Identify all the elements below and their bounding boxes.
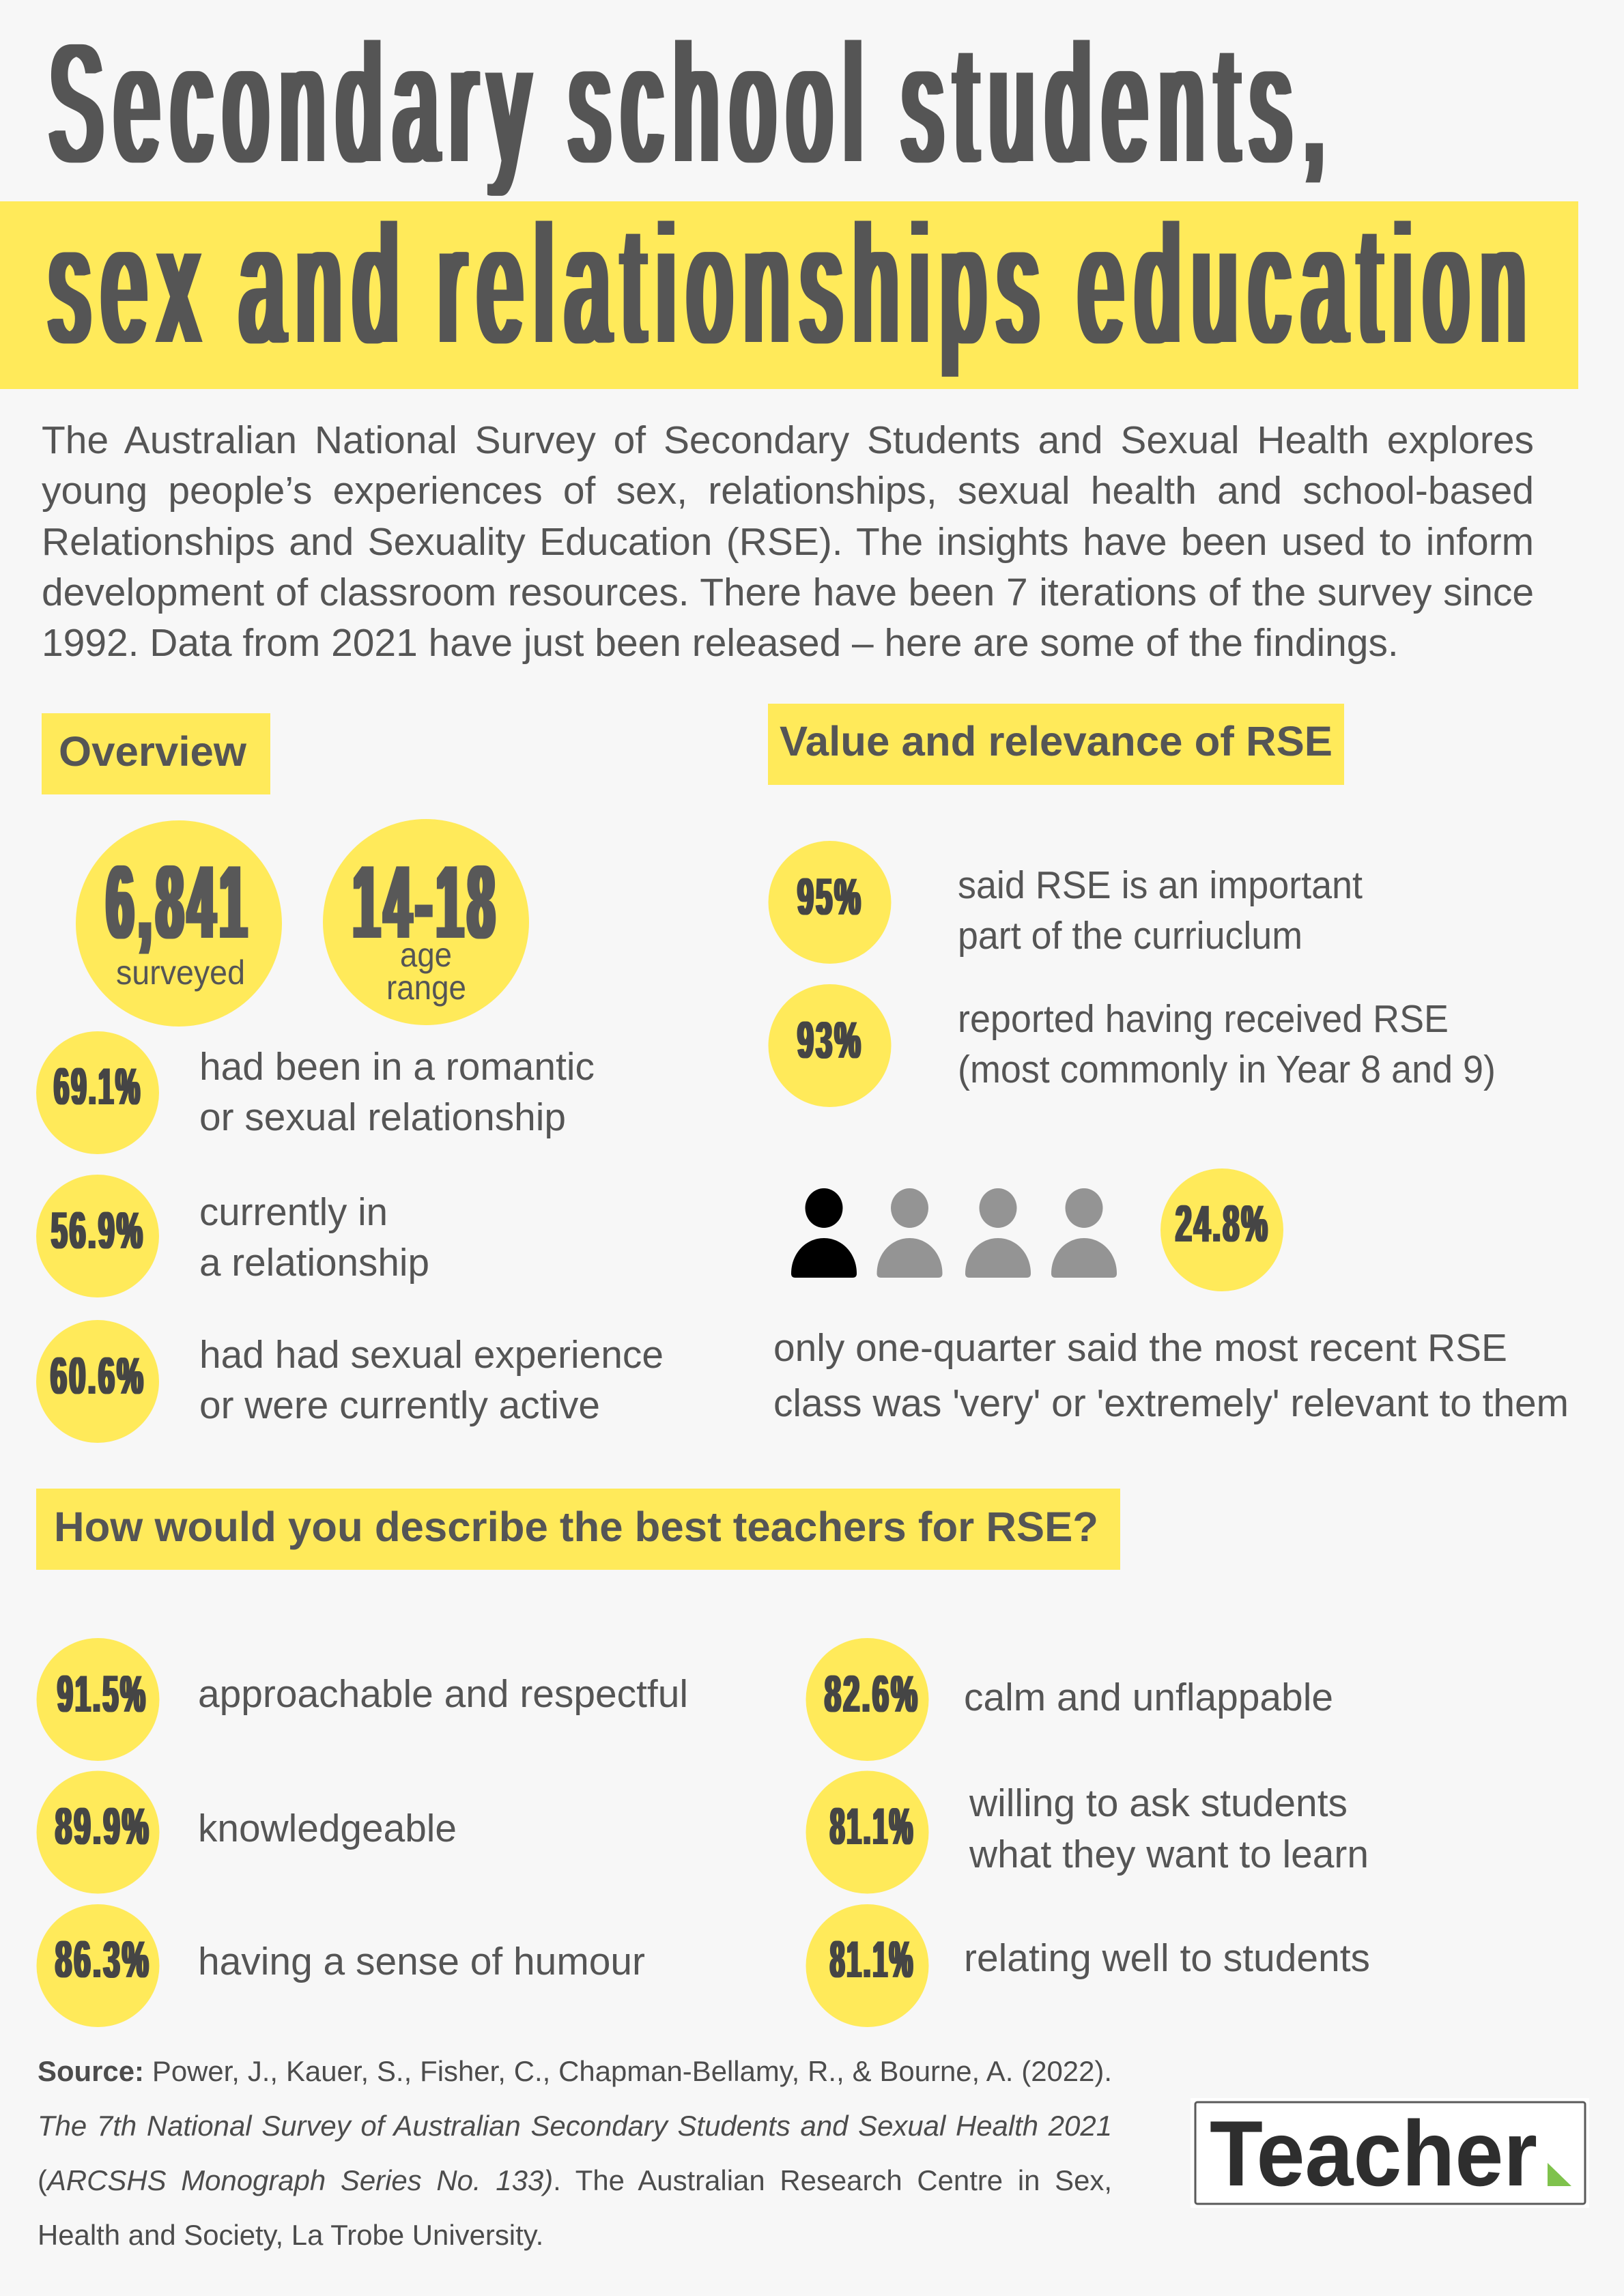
intro text block: 1992. Data from 2021 have just been released – here are some of the findings. bbox=[42, 621, 1399, 665]
stat: 6,841 surveyed: 6,841 bbox=[106, 844, 251, 960]
heading: best teachers: How would you describe the best teachers for RSE? bbox=[54, 1504, 1098, 1550]
stat: 60.6%: had had sexual experience bbox=[199, 1333, 664, 1377]
logo: Teacher: Teacher bbox=[1210, 2101, 1537, 2205]
stat: 60.6%: 60.6% bbox=[51, 1347, 145, 1405]
stat: 91.5%: 91.5% bbox=[57, 1665, 147, 1723]
panel: value and relevance of RSE bbox=[768, 704, 1569, 1425]
icon: person grey 2 bbox=[965, 1188, 1031, 1278]
stat: 95%: 95% bbox=[797, 868, 863, 926]
stat: 69.1% bbox=[36, 1031, 595, 1154]
panel: overview bbox=[36, 713, 664, 1443]
text: one-quarter relevance bbox=[773, 1326, 1569, 1425]
stat: 81.1% willing: what they want to learn bbox=[969, 1833, 1369, 1876]
text: one-quarter relevance: class was 'very' or 'extremely' relevant to them bbox=[773, 1381, 1569, 1425]
intro text block: Relationships and Sexuality Education (RSE). The insights have been used to inform bbox=[42, 520, 1534, 564]
stat: 56.9%: a relationship bbox=[199, 1241, 429, 1285]
stat: 56.9%: 56.9% bbox=[51, 1202, 145, 1260]
stat: 81.1% willing: 81.1% bbox=[830, 1798, 915, 1856]
heading: best teachers bbox=[36, 1489, 1120, 1570]
source text block: Health and Society, La Trobe University. bbox=[38, 2219, 543, 2251]
stat: 60.6%: or were currently active bbox=[199, 1383, 600, 1427]
stat: 6,841 surveyed: surveyed bbox=[116, 953, 245, 992]
icon: four people, one highlighted bbox=[791, 1188, 1117, 1278]
heading: value and relevance: Value and relevance of RSE bbox=[780, 718, 1333, 764]
stat: 60.6% bbox=[36, 1320, 664, 1443]
text: one-quarter relevance: only one-quarter said the most recent RSE bbox=[773, 1326, 1507, 1370]
stat: 56.9% bbox=[36, 1175, 429, 1297]
stat: 86.3%: 86.3% bbox=[55, 1931, 151, 1989]
stat: 24.8%: 24.8% bbox=[1176, 1195, 1270, 1253]
stat: 14-18 age range bbox=[323, 819, 529, 1025]
stat: 89.9% bbox=[37, 1770, 457, 1893]
heading: overview bbox=[42, 713, 270, 794]
stat: 91.5%: approachable and respectful bbox=[198, 1672, 688, 1716]
stat: 24.8% bbox=[1160, 1168, 1283, 1291]
stat: 82.6% bbox=[806, 1638, 1333, 1761]
stat: 91.5% bbox=[37, 1638, 688, 1761]
intro text block: young people’s experiences of sex, relationships, sexual health and school-based bbox=[42, 469, 1534, 513]
source text block: Source: Power, J., Kauer, S., Fisher, C., Chapman-Bellamy, R., & Bourne, A. (2022). bbox=[38, 2055, 1112, 2087]
intro text block: development of classroom resources. There have been 7 iterations of the survey since bbox=[42, 571, 1534, 614]
title bbox=[0, 10, 1578, 389]
stat: 69.1%: had been in a romantic bbox=[199, 1045, 595, 1089]
stat: 93% bbox=[769, 984, 1496, 1107]
icon: person black bbox=[791, 1188, 857, 1278]
stat: 82.6%: calm and unflappable bbox=[964, 1676, 1333, 1719]
heading: overview: Overview bbox=[59, 728, 247, 775]
stat: 86.3% bbox=[37, 1904, 645, 2027]
stat: 95%: said RSE is an important bbox=[958, 863, 1363, 907]
stat: 81.1% willing bbox=[806, 1770, 1369, 1893]
stat: 14-18 age range: 14-18 bbox=[353, 844, 499, 960]
stat: 14-18 age range: range bbox=[386, 968, 466, 1007]
stat: 6,841 surveyed bbox=[76, 820, 282, 1027]
stat: 82.6%: 82.6% bbox=[825, 1665, 920, 1723]
stat: 81.1% relating: relating well to students bbox=[964, 1936, 1370, 1980]
stat: 56.9%: currently in bbox=[199, 1190, 388, 1234]
intro text block bbox=[42, 415, 1534, 674]
stat: 81.1% willing: willing to ask students bbox=[969, 1781, 1348, 1825]
stat: 14-18 age range: age bbox=[400, 936, 452, 974]
intro text block: The Australian National Survey of Secondary Students and Sexual Health explores bbox=[42, 418, 1534, 462]
source text block: The 7th National Survey of Australian Secondary Students and Sexual Health 2021 bbox=[38, 2110, 1112, 2142]
stat: 86.3%: having a sense of humour bbox=[198, 1940, 645, 1983]
source text block: (ARCSHS Monograph Series No. 133). The Australian Research Centre in Sex, bbox=[38, 2164, 1112, 2196]
stat: 81.1% relating: 81.1% bbox=[830, 1931, 915, 1989]
icon: person grey 1 bbox=[877, 1188, 942, 1278]
stat: 81.1% relating bbox=[806, 1904, 1370, 2027]
stat: 93%: reported having received RSE bbox=[958, 997, 1449, 1041]
stat: 95% bbox=[769, 841, 1363, 964]
stat: 93%: (most commonly in Year 8 and 9) bbox=[958, 1048, 1496, 1091]
stat: 93%: 93% bbox=[797, 1011, 863, 1070]
stat: 89.9%: 89.9% bbox=[55, 1798, 151, 1856]
stat: 69.1%: or sexual relationship bbox=[199, 1095, 566, 1139]
stat: 69.1%: 69.1% bbox=[54, 1058, 142, 1116]
panel: best teachers for RSE bbox=[36, 1489, 1370, 2027]
icon: person grey 3 bbox=[1051, 1188, 1117, 1278]
source text block bbox=[38, 2044, 1112, 2269]
stat: 95%: part of the curriuclum bbox=[958, 914, 1302, 958]
heading: value and relevance bbox=[768, 704, 1344, 785]
stat: 89.9%: knowledgeable bbox=[198, 1807, 457, 1850]
